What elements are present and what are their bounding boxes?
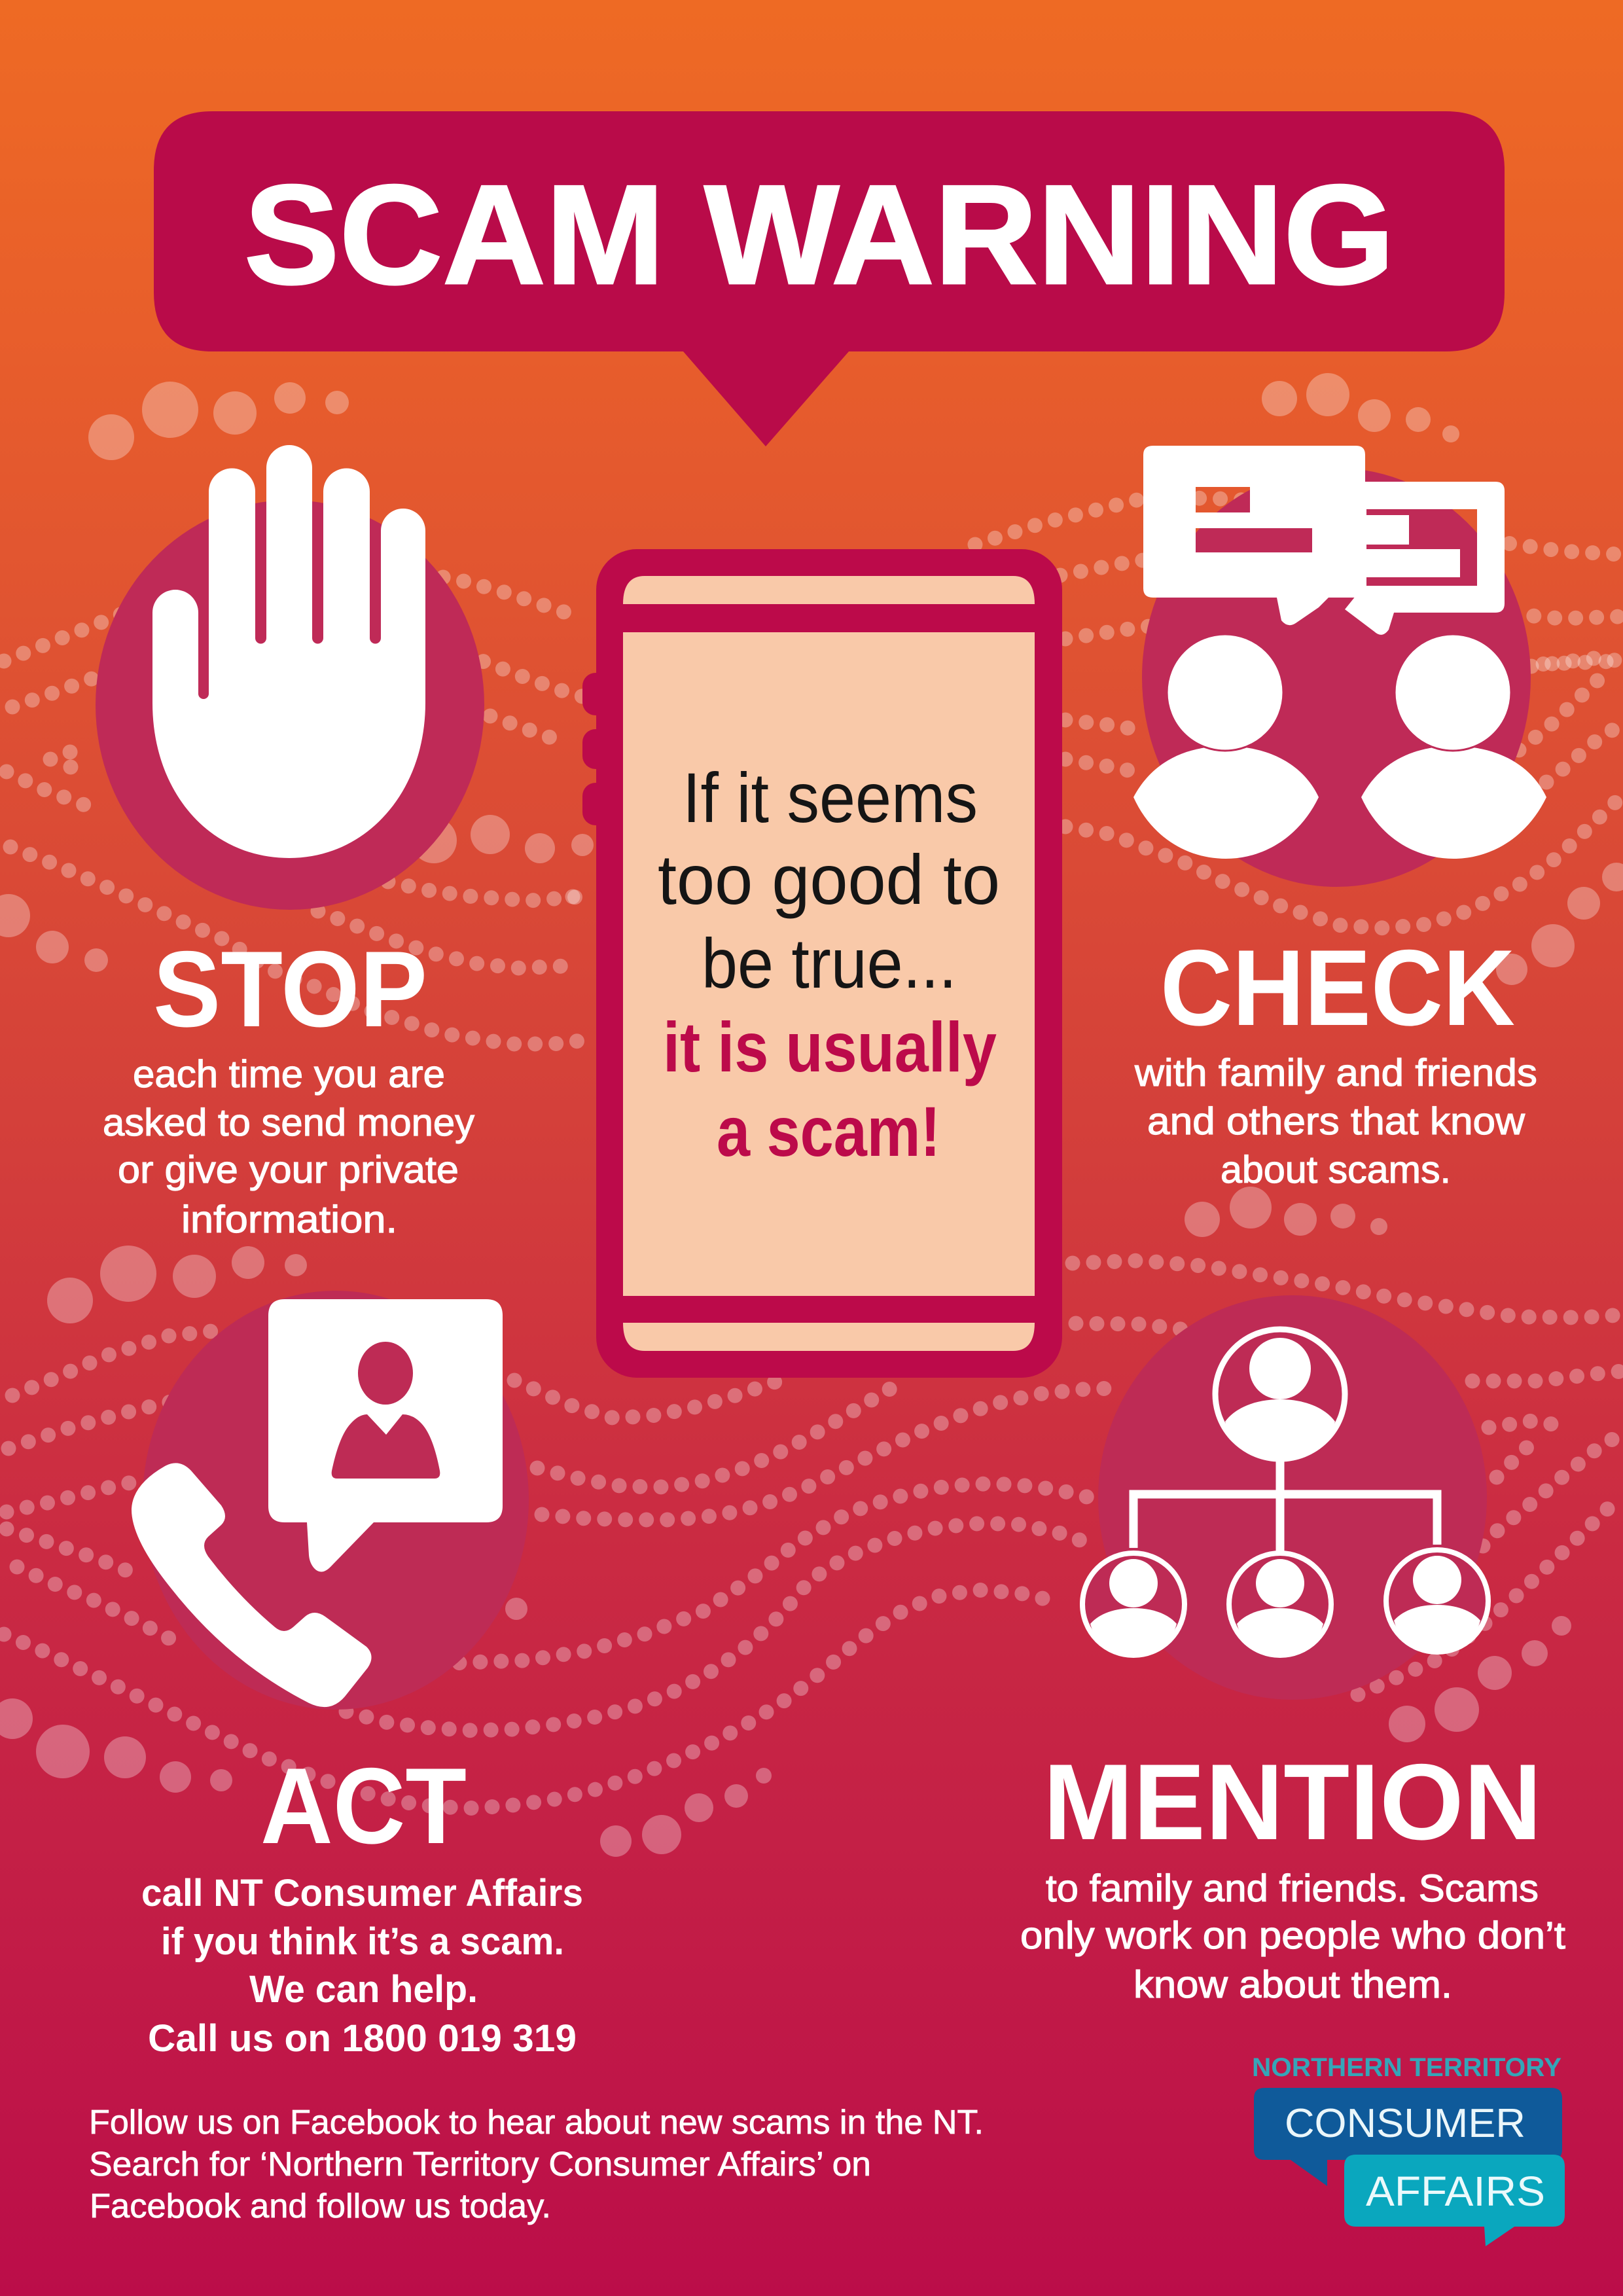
title text: SCAM WARNING [244,155,1395,314]
logo: NT Consumer Affairs: AFFAIRS [1366,2168,1545,2215]
text: act description [141,1872,583,2060]
text: mention description [1020,1867,1565,2006]
heading: ACT: ACT [260,1746,467,1866]
text: check description [1134,1052,1537,1191]
heading: MENTION: MENTION [1043,1742,1542,1862]
icon: two people with speech bubbles [1133,446,1546,887]
heading: STOP: STOP [153,929,427,1049]
phone message text: it is usually [663,1007,997,1086]
text: mention description: only work on people who don’t [1020,1914,1565,1957]
text: check description: with family and friends [1134,1052,1537,1094]
phone message text [658,758,1000,1171]
phone message text: be true... [702,924,957,1003]
text: stop description: information. [181,1198,397,1241]
background large dots [0,373,1623,1857]
text: act description: if you think it’s a scam. [161,1920,564,1963]
phone with central message [582,549,1062,1378]
text: facebook footer [89,2104,984,2225]
text: stop description: asked to send money [103,1102,474,1144]
logo: NT Consumer Affairs: NORTHERN TERRITORY [1252,2053,1561,2082]
text: mention description: know about them. [1133,1964,1452,2006]
text: act description: call NT Consumer Affairs [141,1872,583,1914]
text: facebook footer: Search for ‘Northern Territory Consumer Affairs’ on [89,2145,871,2183]
logo: NT Consumer Affairs [1252,2053,1565,2246]
icon: network of people [1082,1295,1488,1700]
text: act description: Call us on 1800 019 319 [148,2017,577,2060]
icon: phone handset with speech bubble [132,1291,529,1710]
text: stop description: each time you are [133,1053,445,1096]
text: facebook footer: Facebook and follow us today. [90,2187,551,2225]
background dot waves [4,498,1623,1808]
logo: NT Consumer Affairs: CONSUMER [1285,2101,1525,2146]
text: check description: and others that know [1147,1100,1525,1143]
icon: stop hand [96,445,484,910]
phone message text: If it seems [683,758,978,837]
text: mention description: to family and friends. Scams [1046,1867,1539,1910]
text: check description: about scams. [1221,1149,1451,1191]
text: facebook footer: Follow us on Facebook to hear about new scams in the NT. [89,2104,984,2142]
phone message text: a scam! [717,1092,940,1171]
text: stop description [103,1053,474,1241]
text: stop description: or give your private [118,1149,459,1191]
title speech banner [154,111,1505,446]
phone side buttons [582,673,609,825]
heading: CHECK: CHECK [1160,927,1515,1048]
phone message text: too good to [658,840,1000,919]
text: act description: We can help. [249,1968,478,2011]
